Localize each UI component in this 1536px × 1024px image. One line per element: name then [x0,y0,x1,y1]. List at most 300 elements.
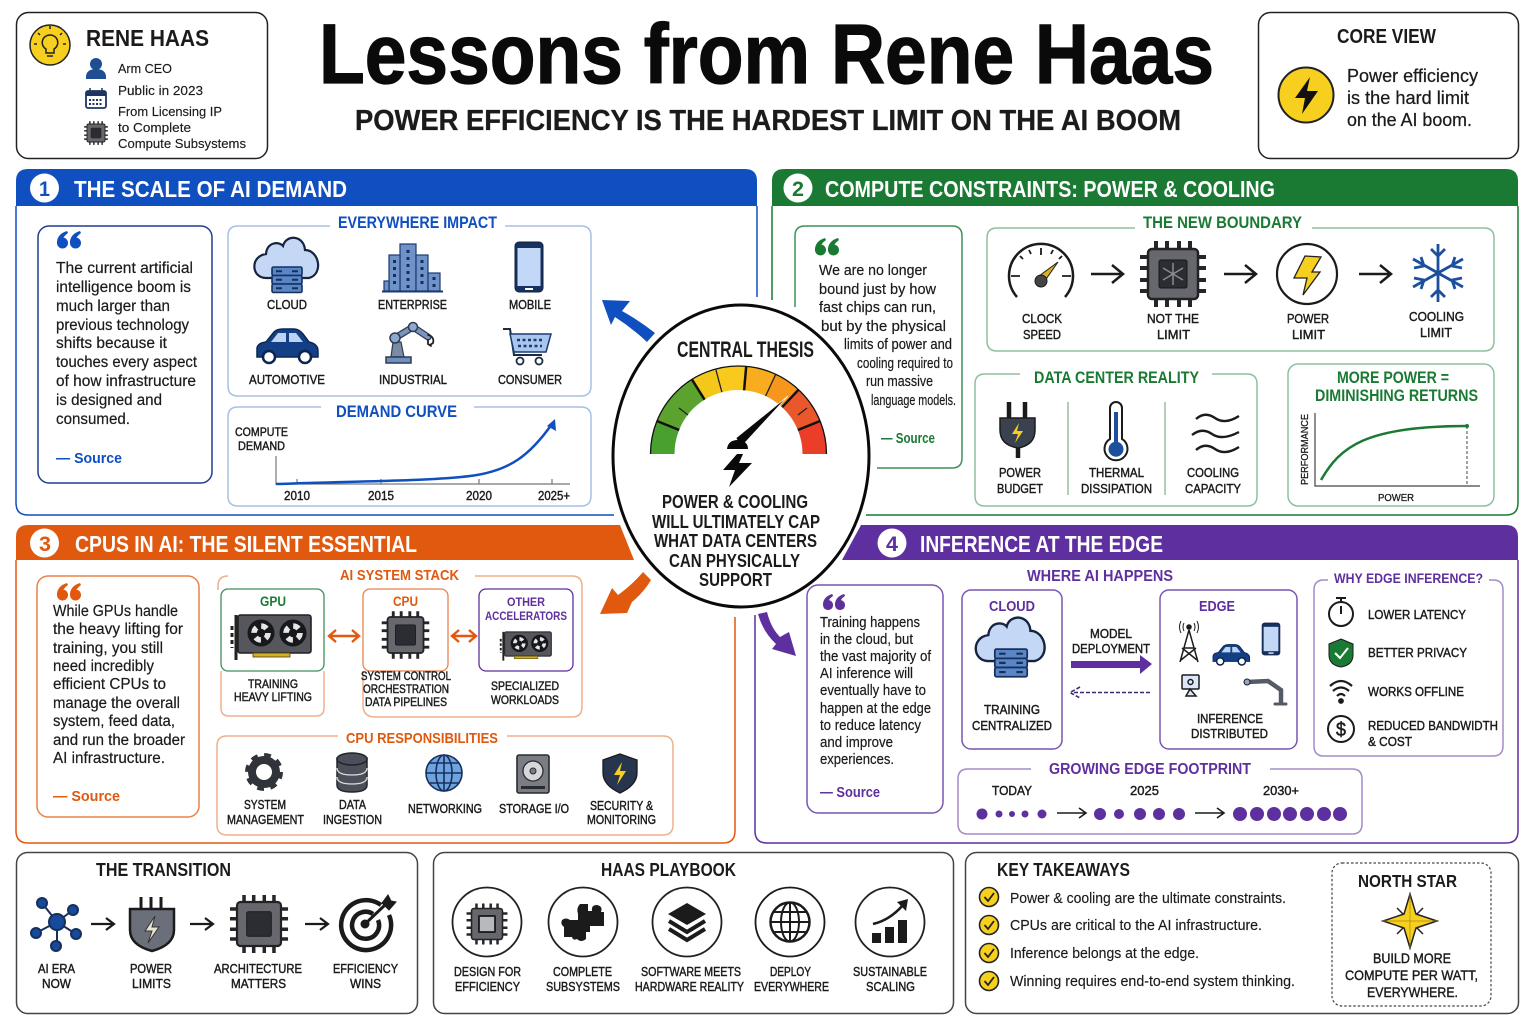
icon: database [337,753,367,792]
axis label: DEMAND [238,441,285,453]
icon: target [341,895,396,950]
header [772,169,1518,206]
label: DISSIPATION [1081,482,1152,496]
header: COMPUTE CONSTRAINTS: POWER & COOLING [825,176,1275,202]
heading: DATA CENTER REALITY [1034,369,1199,387]
label: MONITORING [587,813,656,827]
statement [1345,950,1478,1000]
label: MANAGEMENT [227,813,304,827]
icon: calendar [86,88,106,108]
label: LIMIT [1157,328,1190,342]
icon: plug [1000,402,1035,458]
arrow: to section 1 [602,300,655,342]
quote text: much larger than [56,298,170,315]
label [1022,312,1063,342]
line chart: PERFORMANCE [1299,414,1311,485]
header: 2 [792,178,804,201]
icon: automotive [257,329,318,363]
label: AI ERA [38,962,76,976]
label [130,962,172,991]
profile card [16,12,268,158]
header: THE SCALE OF AI DEMAND [74,176,347,202]
label [333,962,399,991]
label: SPEED [1023,328,1061,342]
heading: CPU RESPONSIBILITIES [346,730,498,747]
needle [727,396,788,449]
label [38,962,76,991]
label: INDUSTRIAL [379,373,447,387]
thesis statement: WILL ULTIMATELY CAP [652,512,820,532]
core statement [1347,66,1478,130]
arrow [1224,265,1256,283]
GPU card [221,589,324,704]
label [454,965,521,994]
quote text: manage the overall [53,695,180,712]
label: REDUCED BANDWIDTH [1368,719,1498,733]
icon: globe [756,888,824,956]
label [1185,466,1242,496]
icon: network [31,898,81,951]
icon: snowflake [1413,244,1463,302]
quote text: AI infrastructure. [53,750,165,767]
everywhere impact [228,214,591,396]
quote text: cooling required to [857,355,953,372]
quote text: We are no longer [819,262,927,279]
accelerators card: ACCELERATORS [485,609,567,623]
accelerators card: WORKLOADS [491,695,559,707]
timeline labels: 2030+ [1263,784,1299,798]
icon: robot arm [1244,679,1286,704]
heading: THE NEW BOUNDARY [1143,214,1302,232]
heading: HAAS PLAYBOOK [601,860,736,880]
icon: lightbulb [30,25,70,65]
label: BUDGET [997,482,1043,496]
quote text: touches every aspect [56,354,198,371]
statement: COMPUTE PER WATT, [1345,967,1478,983]
line chart: POWER [1378,492,1414,504]
quote card [37,576,199,817]
north star callout [1332,863,1491,1006]
heading: KEY TAKEAWAYS [997,860,1130,880]
heading: DIMINISHING RETURNS [1315,387,1478,405]
icon: globe [426,755,462,791]
icon: cell tower [1180,621,1198,662]
panel: inference at the edge [755,525,1518,843]
quote text: the vast majority of [820,649,932,665]
heading: WHERE AI HAPPENS [1027,568,1173,585]
label: SYSTEM [244,798,286,812]
label: DEPLOY [770,965,812,979]
label: LIMIT [1420,326,1452,340]
label [1147,312,1199,342]
quote text: The current artificial [56,260,193,277]
label: MATTERS [231,977,286,991]
quote card [38,226,212,483]
heading: AI SYSTEM STACK [340,567,459,584]
quote text: need incredibly [53,658,154,675]
timeline labels: 2025 [1130,784,1159,798]
label [1081,466,1152,496]
icon: person [86,58,106,79]
cloud card: CENTRALIZED [972,719,1052,733]
chart [276,419,570,503]
icon: wifi [1330,681,1352,703]
description: From Licensing IP [118,104,222,119]
icon: north star [1383,894,1437,948]
role: Arm CEO [118,61,172,76]
GPU card: GPU [260,594,286,609]
dots: 2025 [1094,808,1185,820]
quote text: fast chips can run, [819,299,936,316]
thesis statement: SUPPORT [699,570,772,590]
quote text: system, feed data, [53,713,175,730]
arrow [190,918,213,930]
arrow: to section 4 [758,612,796,656]
icon: layers [652,888,722,956]
quote text: training, you still [53,640,163,657]
heading: EVERYWHERE IMPACT [338,214,497,232]
edge card: EDGE [1199,599,1235,615]
cloud card [962,590,1062,749]
model deployment label [1072,627,1150,656]
label: DESIGN FOR [454,965,521,979]
label: AUTOMOTIVE [249,373,325,387]
arrow [1057,808,1086,818]
quote text: experiences. [820,752,894,768]
quote mark [815,238,839,256]
quote mark [823,594,845,610]
dots: today [976,808,1046,820]
heading: GROWING EDGE FOOTPRINT [1049,761,1251,778]
arrow: feedback [1070,687,1150,698]
label [635,965,745,994]
label: LIMIT [1292,328,1325,342]
icon: design chip [452,888,522,956]
takeaway 4: Winning requires end-to-end system thinking. [1010,974,1295,990]
label [1368,719,1498,749]
thesis statement [652,492,820,590]
arrow: to section 3 [600,572,651,614]
quote text: and improve [820,735,893,751]
header: INFERENCE AT THE EDGE [920,531,1163,557]
label: BETTER PRIVACY [1368,646,1468,660]
quote text: of how infrastructure [56,373,196,390]
label: SUBSYSTEMS [546,980,620,994]
heading [1315,369,1478,405]
label: SECURITY & [590,799,654,813]
label: POWER [999,466,1041,480]
label: POWER [1287,312,1329,326]
quote text: eventually have to [820,683,926,699]
quote text [56,260,198,428]
arrow: deployment [1071,655,1152,674]
quote text: in the cloud, but [820,632,913,648]
public date: Public in 2023 [118,83,203,98]
takeaway 2: CPUs are critical to the AI infrastructure. [1010,918,1262,934]
takeaway 3: Inference belongs at the edge. [1010,946,1199,962]
label: WINS [350,977,381,991]
model deployment label: MODEL [1090,627,1132,641]
label: & COST [1368,735,1412,749]
label [754,965,829,994]
why edge inference [1314,571,1503,756]
header [842,525,1518,560]
quote mark [57,231,81,248]
label: CLOUD [267,298,307,312]
quote text: to reduce latency [820,718,922,734]
icon: storage drive [517,755,549,793]
quote card [807,585,943,813]
new boundary [987,214,1494,351]
icon: industrial robot [386,322,433,363]
label: NOW [42,977,71,991]
icon: growth chart [856,888,924,956]
header: 1 [39,178,50,201]
quote text: previous technology [56,317,189,334]
heading: THE TRANSITION [96,860,231,880]
CPU card: DATA PIPELINES [365,697,447,709]
icon: enterprise building [382,244,443,292]
icon: dollar [1328,716,1354,742]
icon: camera [1182,675,1199,696]
icon: dollar: $ [1336,720,1346,741]
label [587,799,656,827]
quote text: efficient CPUs to [53,676,166,693]
label: STORAGE I/O [499,802,569,816]
icon: architecture chip [230,895,288,953]
diminishing returns [1288,364,1494,506]
quote text: the heavy lifting for [53,621,183,638]
label: POWER [130,962,172,976]
edge card: INFERENCE [1197,712,1263,726]
quote text [820,615,932,768]
label: NETWORKING [408,802,482,816]
label: SOFTWARE MEETS [641,965,741,979]
thesis statement: CAN PHYSICALLY [669,551,800,571]
label [1409,310,1464,340]
heading: CORE VIEW [1337,26,1436,48]
icon: power limit [1277,244,1337,304]
where AI happens [962,568,1297,749]
label: COMPLETE [553,965,612,979]
dots: 2030+ [1233,807,1347,821]
panel: Haas playbook [434,852,954,1014]
central thesis [613,305,869,607]
panel: compute constraints [772,169,1518,515]
title: Lessons from Rene Haas [319,7,1214,101]
CPU responsibilities [217,730,673,835]
label: NOT THE [1147,312,1199,326]
quote mark [57,583,81,600]
arrow [305,918,328,930]
label: DATA [339,798,367,812]
icon: privacy shield [1329,639,1353,667]
icon: thermometer [1104,402,1128,460]
quote text [819,262,956,409]
cloud card: CLOUD [989,599,1035,615]
quote text: and run the broader [53,732,185,749]
label: EFFICIENCY [333,962,399,976]
label: ARCHITECTURE [214,962,302,976]
chart: 2010 [284,489,310,503]
panel: key takeaways [966,852,1518,1014]
gauge [650,366,826,454]
icon: bolt [723,454,752,487]
axis label: COMPUTE [235,427,288,439]
source: — Source [820,785,880,801]
source: — Source [881,430,935,447]
accelerators card: OTHER [507,595,545,609]
label: ENTERPRISE [378,298,447,312]
source: — Source [53,788,120,805]
icon: mobile [515,242,543,292]
label: LOWER LATENCY [1368,608,1467,622]
label: INGESTION [323,813,382,827]
description: Compute Subsystems [118,136,246,151]
header: CPUS IN AI: THE SILENT ESSENTIAL [75,531,417,557]
quote text: bound just by how [819,281,936,298]
arrow [1359,265,1391,283]
icon: phone [1262,623,1280,655]
accelerators card [479,589,573,707]
label: COOLING [1187,466,1239,480]
icon: security shield [603,754,637,793]
core statement: on the AI boom. [1347,110,1472,130]
panel: CPUs in AI [16,525,735,843]
GPU card: TRAINING [248,677,298,691]
CPU card [361,589,451,709]
takeaway 1: Power & cooling are the ultimate constraints. [1010,891,1286,907]
thesis statement: POWER & COOLING [662,492,808,512]
label [1287,312,1329,342]
core statement: is the hard limit [1347,88,1469,108]
quote text: consumed. [56,411,130,428]
heading: CENTRAL THESIS [677,337,814,362]
icon: car [1213,645,1250,665]
quote card [795,226,962,468]
label: MOBILE [509,298,551,312]
label: CLOCK [1022,312,1063,326]
label: SCALING [866,980,915,994]
quote text: Training happens [820,615,920,631]
timeline labels: TODAY [992,784,1033,798]
icon: cloud [254,238,318,292]
accelerators card: SPECIALIZED [491,681,559,693]
label: CAPACITY [1185,482,1242,496]
quote text: but by the physical [821,318,946,335]
header: 3 [39,533,51,556]
statement: EVERYWHERE. [1367,984,1458,1000]
GPU card: HEAVY LIFTING [234,690,312,704]
label [323,798,382,827]
icon: chip [84,121,108,145]
icon: cooling waves [1192,415,1239,452]
name: RENE HAAS [86,25,209,51]
quote text: run massive [866,373,933,390]
timeline labels [992,784,1299,798]
label [214,962,302,991]
arrow: CPU to accelerators [452,630,476,642]
quote text [53,603,185,767]
description: to Complete [118,120,191,135]
axis label [235,427,288,453]
core view card [1258,12,1518,158]
edge card [1160,590,1297,749]
core statement: Power efficiency [1347,66,1478,86]
label [997,466,1043,496]
icon: power plug [130,897,174,951]
CPU card: ORCHESTRATION [363,684,449,696]
header: 4 [886,533,898,556]
quote text: While GPUs handle [53,603,178,620]
label: EVERYWHERE [754,980,829,994]
data center reality [975,369,1257,506]
label [853,965,927,994]
quote text: is designed and [56,392,162,409]
label [227,798,304,827]
chart: 2015 [368,489,394,503]
CPU card: CPU [393,594,418,609]
heading: NORTH STAR [1358,871,1457,891]
source: — Source [56,450,122,467]
icon: gear [248,756,280,788]
CPU card: SYSTEM CONTROL [361,671,451,683]
statement: BUILD MORE [1373,950,1451,966]
cloud card: TRAINING [984,703,1040,717]
quote text: limits of power and [844,336,952,353]
arrow [91,918,114,930]
edge card: DISTRIBUTED [1191,727,1268,741]
arrow [1091,265,1123,283]
label: SUSTAINABLE [853,965,927,979]
quote text: happen at the edge [820,701,931,717]
label: THERMAL [1089,466,1144,480]
label: COOLING [1409,310,1464,324]
demand curve [228,403,591,506]
heading: WHY EDGE INFERENCE? [1334,571,1483,586]
panel: the transition [16,852,418,1014]
line chart [1299,413,1480,504]
label: EFFICIENCY [455,980,521,994]
quote text: language models. [871,392,956,409]
quote text: AI inference will [820,666,913,682]
icon: shopping cart [503,329,551,364]
icon: puzzle [548,888,618,956]
icon: chip [1140,241,1206,307]
heading: MORE POWER = [1337,369,1449,387]
icon: bolt [1278,68,1334,122]
heading: DEMAND CURVE [336,403,457,421]
description [118,104,246,151]
AI system stack [218,567,582,717]
label: LIMITS [132,977,171,991]
icon: clock speed gauge [1009,244,1073,297]
growing edge footprint [958,761,1362,834]
model deployment label: DEPLOYMENT [1072,642,1150,656]
arrow [1195,808,1224,818]
header [16,525,634,560]
label [546,965,620,994]
header [16,169,757,206]
quote text: intelligence boom is [56,279,191,296]
arrow: GPU to CPU [329,630,359,642]
quote text: shifts because it [56,335,168,352]
chart: 2025+ [538,489,570,503]
panel: scale of AI demand [16,169,757,515]
label: WORKS OFFLINE [1368,685,1464,699]
icon: stopwatch [1329,598,1353,626]
label: HARDWARE REALITY [635,980,745,994]
